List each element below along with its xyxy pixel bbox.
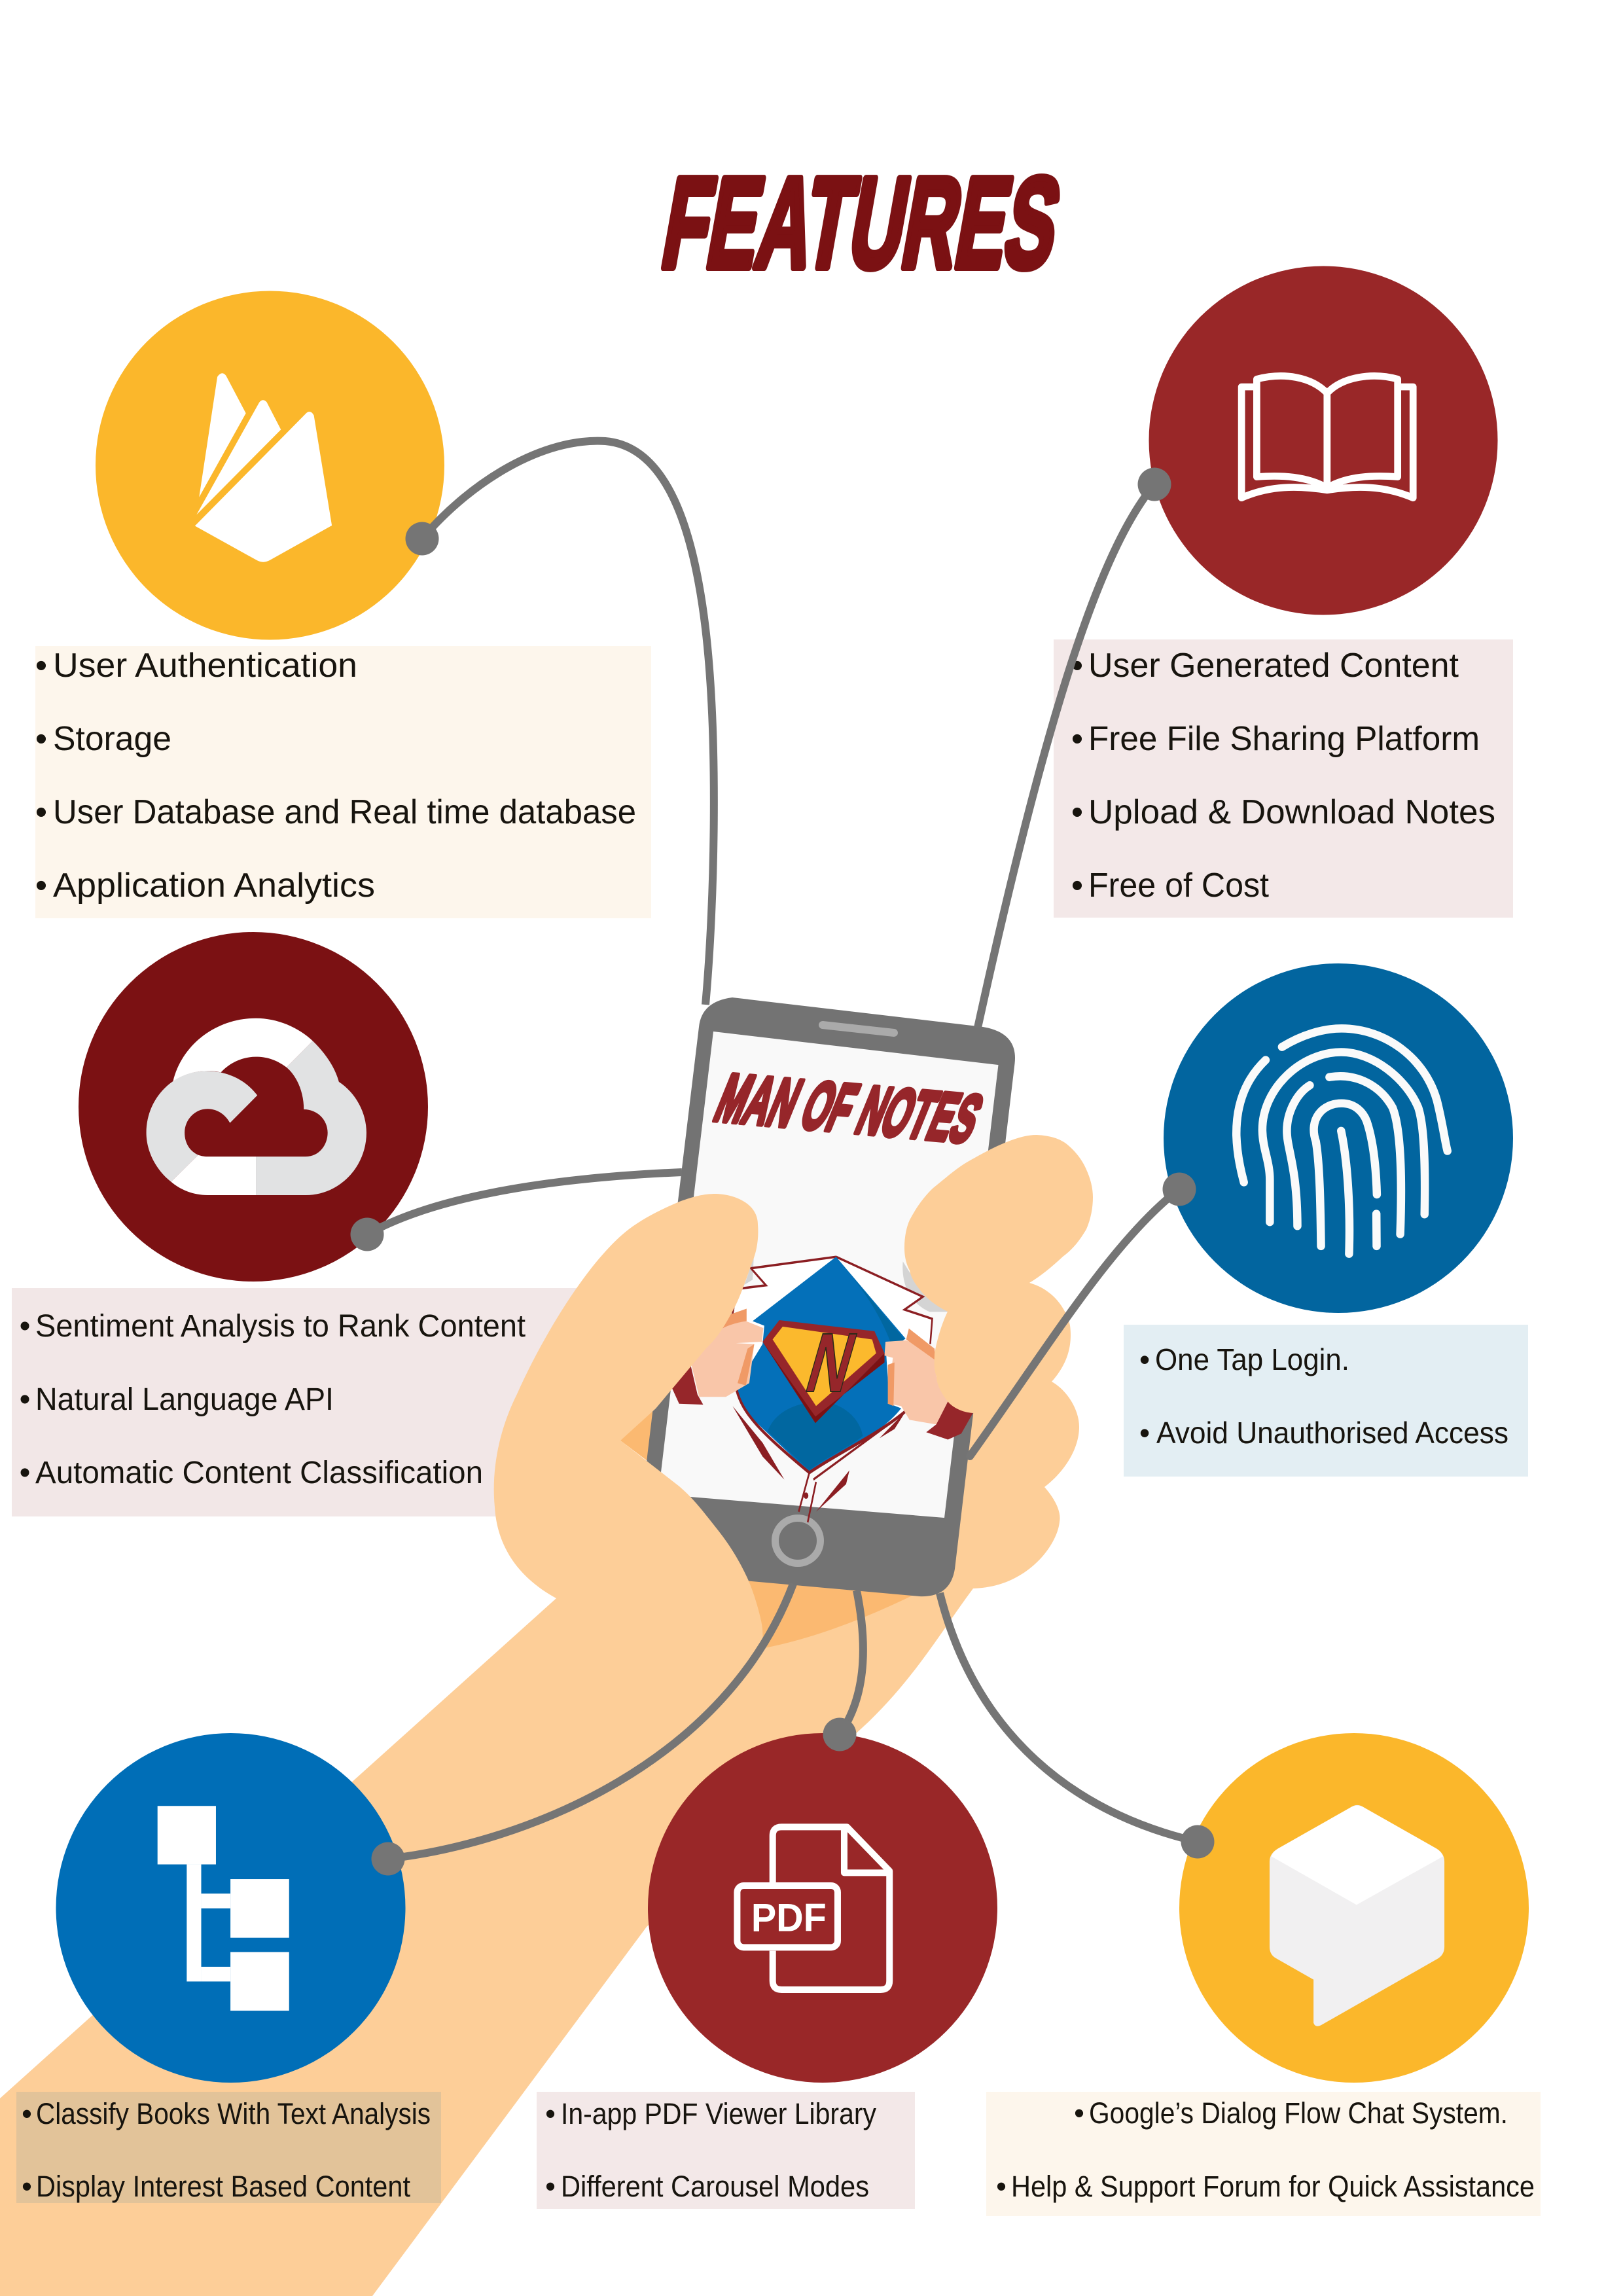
circle: hierarchy tree icon (56, 1733, 406, 2083)
panel: firebase features: User Authentication (53, 647, 357, 685)
phone screen title: MAN OF NOTES (705, 1060, 992, 1157)
connector: tree to phone (372, 1584, 793, 1876)
shadow under phone (620, 1386, 923, 1648)
panel: firebase features: • (35, 867, 47, 905)
panel: cloud features text: Natural Language API (35, 1382, 334, 1417)
logo letter: N (797, 1316, 866, 1409)
superhero logo (671, 1247, 973, 1522)
panel: firebase features: User Database and Real time database (53, 793, 636, 831)
circle: fingerprint icon (1164, 963, 1513, 1313)
phone body (635, 997, 1015, 1596)
panel: text analysis features: Display Interest Based Content (36, 2170, 410, 2203)
panel: chat features: Google’s Dialog Flow Chat System. (1089, 2096, 1508, 2130)
panel: cloud features text: • (20, 1382, 30, 1417)
panel: book features: • (1071, 647, 1083, 685)
panel: fingerprint features: • (1139, 1416, 1150, 1450)
panel: chat features (986, 2092, 1541, 2216)
circle: pdf file icon (648, 1733, 997, 2083)
panel: firebase features (35, 646, 651, 918)
panel: book features: • (1071, 720, 1083, 758)
circle: google cloud icon (79, 932, 428, 1282)
connector: pdf to phone (823, 1590, 863, 1751)
panel: chat features: • (996, 2170, 1007, 2203)
phone screen (658, 1031, 999, 1518)
panel: fingerprint features: One Tap Login. (1155, 1342, 1349, 1376)
panel: cloud features text: Sentiment Analysis to Rank Content (35, 1309, 526, 1344)
panel: book features: • (1071, 793, 1083, 831)
connector: chat to phone (940, 1593, 1215, 1859)
panel: cloud features background (12, 1288, 588, 1516)
front of hand: thumb and palm (494, 1194, 764, 1833)
panel: pdf features: Different Carousel Modes (561, 2170, 869, 2203)
panel: firebase features: Application Analytics (53, 867, 375, 905)
circle: firebase icon (96, 291, 444, 640)
panel: book features: • (1071, 867, 1083, 905)
phone home button (775, 1518, 821, 1563)
panel: fingerprint features (1124, 1325, 1528, 1477)
panel: text analysis features: • (22, 2170, 32, 2203)
panel: firebase features: • (35, 793, 47, 831)
front of hand: fingers (904, 1135, 1093, 1413)
circle: dialogflow chat icon (1179, 1733, 1529, 2083)
panel: chat features: Help & Support Forum for Quick Assistance (1011, 2170, 1535, 2203)
panel: fingerprint features: • (1139, 1342, 1150, 1376)
panel: book features: Free of Cost (1088, 867, 1270, 905)
connector: fingerprint to phone (970, 1173, 1196, 1456)
panel: pdf features (537, 2092, 915, 2209)
panel: book features: User Generated Content (1088, 647, 1459, 685)
circle: open book icon (1149, 266, 1497, 615)
panel: cloud features text: • (20, 1456, 30, 1490)
connector: firebase to phone (406, 441, 714, 1005)
panel: chat features: • (1074, 2096, 1084, 2130)
back of hand and arm (0, 1309, 1079, 2296)
panel: pdf features: In-app PDF Viewer Library (561, 2097, 876, 2130)
panel: firebase features: Storage (53, 720, 171, 758)
panel: cloud features text: Automatic Content Classification (35, 1456, 483, 1490)
panel: pdf features: • (545, 2097, 556, 2130)
panel: firebase features: • (35, 647, 47, 685)
panel: text analysis features (16, 2092, 441, 2203)
panel: cloud features text (20, 1309, 526, 1490)
phone (635, 997, 1015, 1596)
connector: book to phone (978, 467, 1171, 1028)
panel: book features (1054, 639, 1513, 918)
panel: book features: Free File Sharing Platform (1088, 720, 1480, 758)
panel: cloud features text: • (20, 1309, 30, 1344)
panel: text analysis features: Classify Books With Text Analysis (36, 2097, 431, 2130)
panel: fingerprint features: Avoid Unauthorised Access (1156, 1416, 1508, 1450)
panel: text analysis features: • (22, 2097, 32, 2130)
panel: firebase features: • (35, 720, 47, 758)
circle: pdf file icon: PDF (751, 1896, 827, 1940)
phone speaker (823, 1025, 894, 1033)
panel: pdf features: • (545, 2170, 556, 2203)
panel: book features: Upload & Download Notes (1088, 793, 1495, 831)
title: FEATURES (654, 151, 1070, 295)
connector: cloud to phone (351, 1172, 682, 1251)
